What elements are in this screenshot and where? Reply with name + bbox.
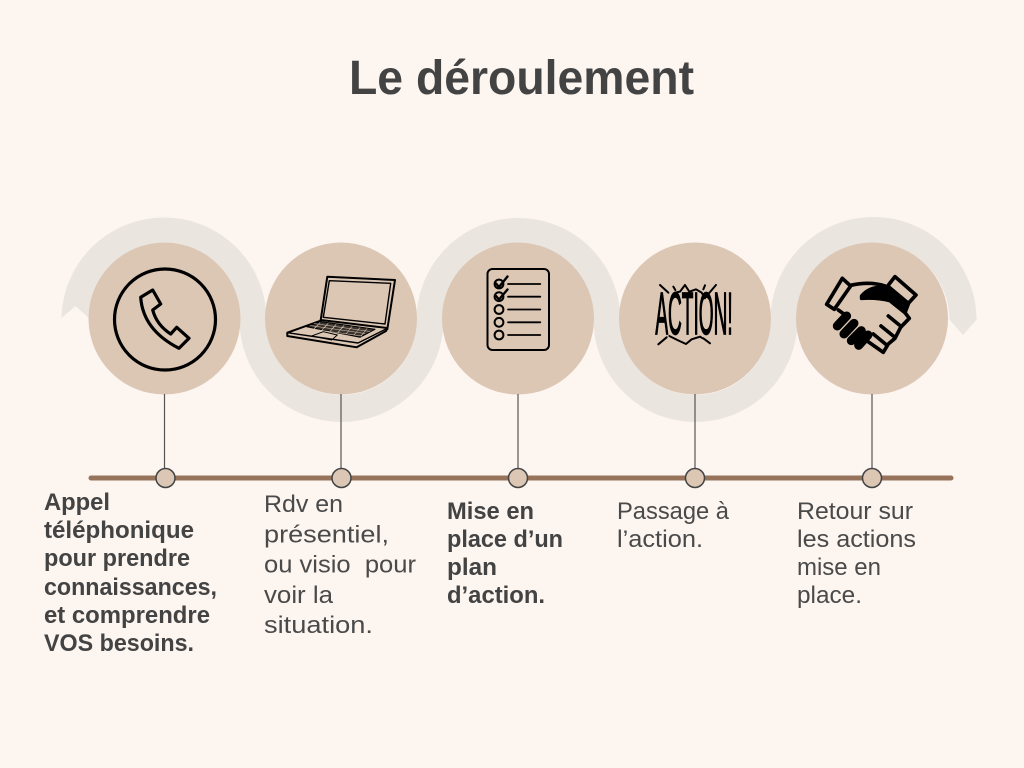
icon: laptop [287, 277, 395, 347]
title: Le déroulement [349, 52, 694, 105]
step 2 connector [340, 394, 342, 468]
icon: action burst [655, 280, 733, 347]
step 4 circle [619, 242, 771, 394]
step 4 connector [694, 394, 696, 468]
text: ACTION! [655, 280, 733, 347]
step 1 text: et comprendre [44, 602, 210, 629]
step 3: action plan [442, 242, 594, 609]
step 3 circle [442, 242, 594, 394]
step 1 text [44, 489, 217, 657]
step 4 text [617, 498, 730, 553]
step 1 timeline dot [156, 468, 175, 488]
step 1 text: connaissances, [44, 574, 217, 601]
step 1 text: pour prendre [44, 545, 190, 572]
step 2 text: ou visio pour [264, 552, 416, 578]
step 5 text [797, 498, 916, 609]
step 4 text: l’action. [617, 526, 703, 553]
step 4 text: Passage à [617, 498, 730, 525]
step 3 text: Mise en [447, 498, 534, 525]
step 1 text: VOS besoins. [44, 630, 194, 657]
step 5: review [796, 242, 948, 609]
step 2 timeline dot [332, 468, 351, 488]
step 2 text [264, 491, 416, 639]
step 3 text: place d’un [447, 526, 563, 553]
step 5 text: les actions [797, 526, 916, 553]
step 1 text: Appel [44, 489, 110, 516]
step 3 timeline dot [508, 468, 528, 488]
step 2 text: situation. [264, 612, 373, 639]
step 3 connector [517, 394, 519, 468]
step 4: taking action [617, 242, 771, 553]
step 5 connector [871, 394, 873, 468]
step 5 timeline dot [862, 468, 882, 488]
decorative wave ribbon behind the circles [58, 230, 977, 408]
step 2 text: Rdv en [264, 491, 343, 518]
step 3 text: plan [447, 554, 497, 581]
step 4 timeline dot [686, 468, 704, 488]
step 2: meeting or video call [264, 242, 417, 639]
step 1 connector [164, 394, 166, 468]
icon: handshake [827, 277, 916, 352]
icon: checklist [488, 269, 549, 350]
step 2 circle [265, 242, 417, 394]
step 3 text [447, 498, 563, 609]
step 5 text: Retour sur [797, 498, 913, 525]
step 2 text: présentiel, [264, 522, 389, 548]
step 5 text: mise en [797, 554, 881, 581]
timeline bar [91, 476, 951, 480]
step 5 text: place. [797, 582, 862, 609]
step 1 text: téléphonique [44, 517, 194, 544]
step 5 circle [796, 242, 948, 394]
step 1 circle [88, 242, 240, 394]
step 3 text: d’action. [447, 582, 545, 609]
icon: phone [114, 269, 216, 370]
step 2 text: voir la [264, 582, 334, 609]
step 1: phone call [44, 242, 240, 657]
